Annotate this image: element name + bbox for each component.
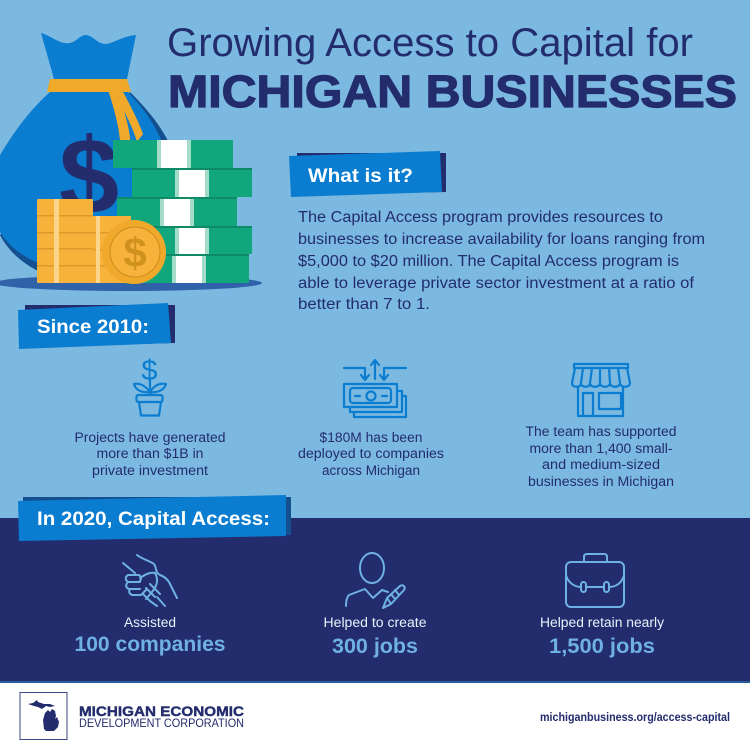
body text: program description: [298, 209, 705, 313]
stat: 300 jobs: 300 jobs: [332, 635, 418, 658]
body text: program description: businesses to increase availability for loans ranging from: [298, 231, 705, 248]
title: [167, 21, 737, 117]
stat: 100 companies: 100 companies: [74, 633, 226, 656]
caption: team supported: The team has supported: [526, 424, 676, 439]
caption: deployed: [298, 430, 444, 478]
stat: 100 companies: [74, 615, 226, 656]
stat: 300 jobs: Helped to create: [324, 615, 426, 630]
logo wordmark: MICHIGAN ECONOMIC: [79, 703, 244, 719]
banner: Since 2010: Since 2010:: [37, 317, 149, 338]
caption: projects: [74, 430, 226, 478]
title: MICHIGAN BUSINESSES: [168, 66, 737, 117]
caption: deployed: $180M has been: [320, 430, 422, 445]
icon: briefcase: [566, 554, 624, 607]
stat: 1,500 jobs: 1,500 jobs: [549, 635, 655, 658]
body text: program description: $5,000 to $20 million. The Capital Access program is: [298, 253, 679, 270]
logo wordmark: [79, 703, 244, 730]
logo: Michigan outline: [20, 692, 67, 740]
caption: deployed: deployed to companies: [298, 446, 444, 461]
caption: projects: more than $1B in: [96, 446, 204, 461]
icon: handshake: [123, 555, 177, 606]
body text: program description: The Capital Access program provides resources to: [298, 209, 663, 226]
website URL: michiganbusiness.org/access-capital: [540, 710, 730, 724]
stat: 1,500 jobs: Helped retain nearly: [540, 615, 664, 630]
stat: 300 jobs: [324, 615, 426, 658]
illustration: money bag, cash and coins: $: [59, 115, 119, 236]
illustration: money bag, cash and coins: $: [123, 229, 147, 276]
icon: plant with dollar sign: [134, 355, 166, 416]
icon: person with pencil: [346, 553, 405, 608]
caption: team supported: [526, 424, 676, 489]
banner: In 2020, Capital Access: In 2020, Capital Access:: [37, 509, 270, 530]
icon: plant with dollar sign: $: [141, 355, 158, 387]
banner: Since 2010: [18, 303, 175, 349]
caption: team supported: more than 1,400 small-: [530, 441, 672, 456]
banner: What is it?: [289, 151, 446, 197]
body text: program description: able to leverage private sector investment at a ratio of: [298, 275, 695, 292]
footer: [0, 681, 750, 750]
body text: program description: better than 7 to 1.: [298, 296, 430, 313]
caption: projects: private investment: [92, 463, 208, 478]
stat: 1,500 jobs: [540, 615, 664, 658]
icon: storefront: [572, 364, 630, 416]
caption: team supported: businesses in Michigan: [528, 474, 674, 489]
banner: In 2020, Capital Access: [18, 495, 291, 541]
banner: What is it?: What is it?: [308, 166, 413, 187]
title: Growing Access to Capital for: [167, 21, 693, 65]
caption: deployed: across Michigan: [322, 463, 420, 478]
logo wordmark: DEVELOPMENT CORPORATION: [79, 718, 244, 730]
caption: team supported: and medium-sized: [542, 457, 660, 472]
caption: projects: Projects have generated: [74, 430, 226, 445]
illustration: money bag, cash and coins: [0, 33, 262, 291]
icon: money stack with arrows: [344, 360, 406, 417]
stat: 100 companies: Assisted: [124, 615, 176, 630]
dark band background: [0, 518, 750, 683]
